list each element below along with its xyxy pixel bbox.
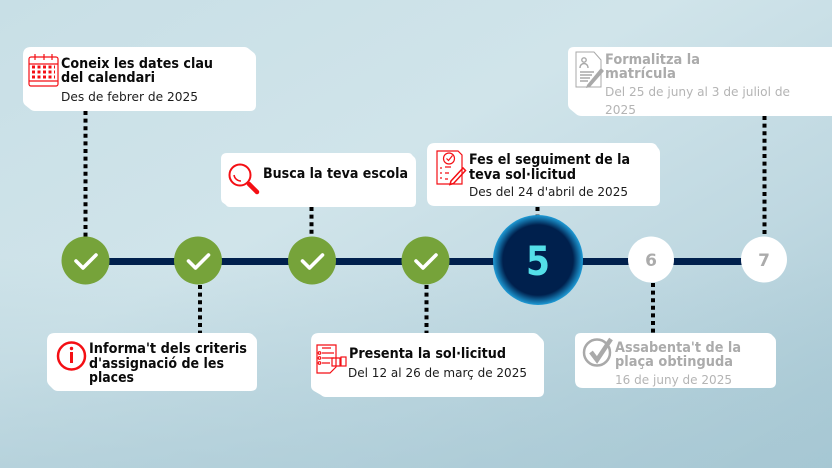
- node 6: upcoming: 6: [645, 251, 657, 271]
- panel: step 4 submit application: [311, 333, 544, 397]
- connector: step 2: [198, 285, 202, 333]
- heading: plaça obtinguda: [615, 354, 733, 370]
- connector: step 6: [651, 283, 655, 333]
- heading: places: [89, 370, 134, 386]
- node 3: completed: [288, 236, 336, 284]
- node 2: completed: [174, 236, 222, 284]
- timeline line: [85, 258, 765, 265]
- icon: magnifying glass: [230, 164, 257, 192]
- date: 16 de juny de 2025: [615, 372, 732, 387]
- node 5: current step: [493, 215, 583, 305]
- heading: [605, 52, 700, 82]
- heading: d'assignació de les: [89, 356, 224, 372]
- heading: teva sol·licitud: [469, 167, 576, 183]
- node 7: upcoming: 7: [758, 251, 770, 271]
- connector: step 5: [536, 207, 540, 216]
- icon: calendar: [29, 54, 58, 86]
- connector: step 4: [424, 285, 428, 333]
- date: Des del 24 d'abril de 2025: [469, 184, 628, 199]
- date: 2025: [605, 102, 636, 117]
- date: Del 12 al 26 de març de 2025: [348, 365, 527, 380]
- panel: step 1 calendar dates: [23, 47, 256, 111]
- date: [605, 84, 790, 117]
- heading: [469, 152, 630, 183]
- panel: step 7 enrolment: [568, 47, 832, 117]
- icon: information: [58, 342, 85, 370]
- heading: Formalitza la: [605, 52, 700, 68]
- heading: [615, 340, 741, 370]
- icon: enrolment form: [576, 52, 604, 88]
- connector: step 3: [310, 207, 314, 237]
- heading: Informa't dels criteris: [89, 341, 247, 357]
- node 1: completed: [62, 236, 110, 284]
- heading: del calendari: [61, 70, 155, 86]
- heading: Fes el seguiment de la: [469, 152, 630, 168]
- heading: Assabenta't de la: [615, 340, 741, 356]
- node 4: completed: [402, 236, 450, 284]
- connector: step 1: [84, 111, 88, 238]
- heading: [61, 56, 213, 86]
- icon: check mark: [584, 339, 611, 366]
- heading: Coneix les dates clau: [61, 56, 213, 72]
- icon: checklist with pencil: [437, 151, 466, 184]
- connector: step 7: [762, 116, 766, 238]
- heading: Presenta la sol·licitud: [349, 346, 506, 362]
- panel: step 2 criteria: [47, 333, 257, 391]
- icon: application form: [317, 345, 346, 373]
- node 5: current step: 5: [526, 239, 550, 285]
- date: Del 25 de juny al 3 de juliol de: [605, 84, 790, 99]
- node 6: upcoming: [628, 236, 674, 282]
- heading: Busca la teva escola: [263, 166, 408, 182]
- panel: step 6 assigned place: [575, 333, 776, 388]
- panel: step 3 find school: [221, 153, 416, 207]
- date: Des de febrer de 2025: [61, 89, 198, 104]
- node 7: upcoming: [741, 236, 787, 282]
- heading: [89, 341, 247, 386]
- panel: step 5 follow up: [427, 143, 660, 206]
- heading: matrícula: [605, 66, 676, 82]
